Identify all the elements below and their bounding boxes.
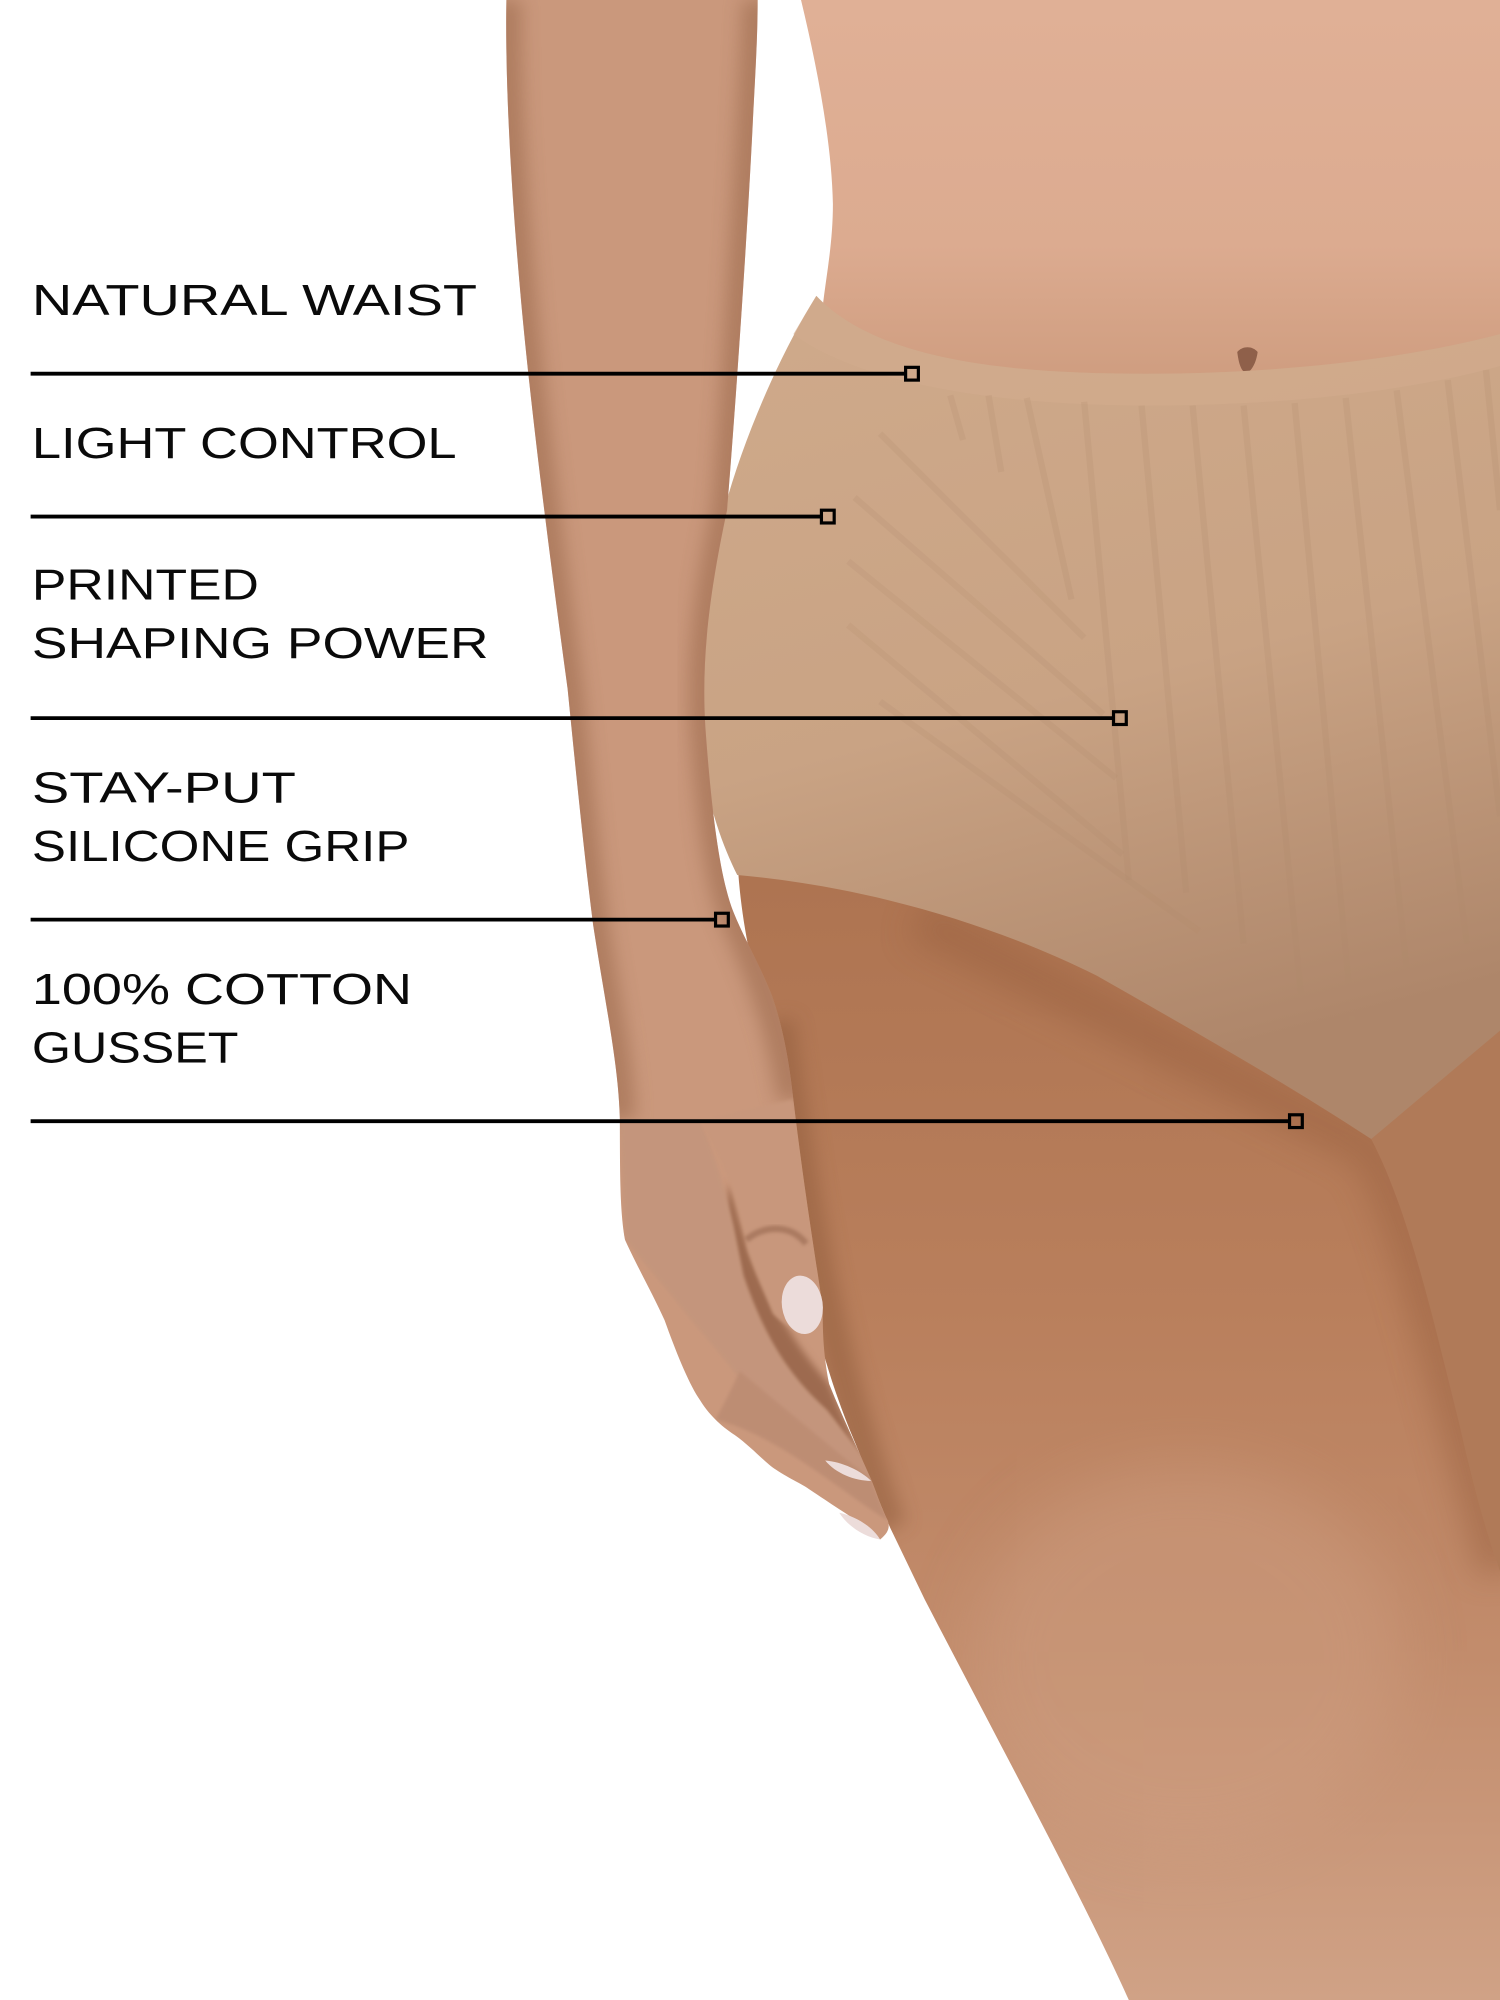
thumb [734, 1102, 792, 1326]
callout: light control: LIGHT CONTROL [32, 419, 457, 468]
printed shaping lines: diagonal [848, 434, 1199, 931]
navel [1237, 347, 1258, 372]
arm edge shading [506, 0, 620, 1120]
callout: printed shaping power: SHAPING POWER [32, 619, 489, 668]
callout: stay-put silicone grip [31, 763, 728, 926]
leg shading [918, 918, 1500, 1571]
callout: 100% cotton gusset: GUSSET [32, 1023, 239, 1072]
callout: printed shaping power [31, 560, 1126, 724]
thumb knuckle [746, 1229, 806, 1244]
callout: stay-put silicone grip: STAY-PUT [32, 763, 296, 812]
callout: 100% cotton gusset: 100% COTTON [32, 965, 412, 1014]
far thigh [1301, 1008, 1500, 1607]
fingernail: index [825, 1460, 871, 1481]
fingernail: thumb [778, 1273, 827, 1337]
brief garment [698, 296, 1500, 1139]
waistband [793, 296, 1500, 406]
index finger [716, 1371, 888, 1520]
printed shaping lines: vertical [950, 370, 1500, 1020]
callout: stay-put silicone grip: SILICONE GRIP [32, 822, 409, 871]
torso skin [801, 0, 1500, 408]
back of hand [620, 1120, 871, 1486]
callout: 100% cotton gusset [31, 965, 1302, 1128]
near leg [714, 842, 1500, 2000]
callout: light control [31, 419, 834, 523]
callout: natural waist [31, 276, 918, 380]
fingernail: middle [839, 1513, 880, 1540]
arm and hand [485, 0, 906, 1556]
callout: natural waist: NATURAL WAIST [32, 276, 477, 325]
callout: printed shaping power: PRINTED [32, 560, 259, 609]
palm shadow [726, 1187, 860, 1456]
